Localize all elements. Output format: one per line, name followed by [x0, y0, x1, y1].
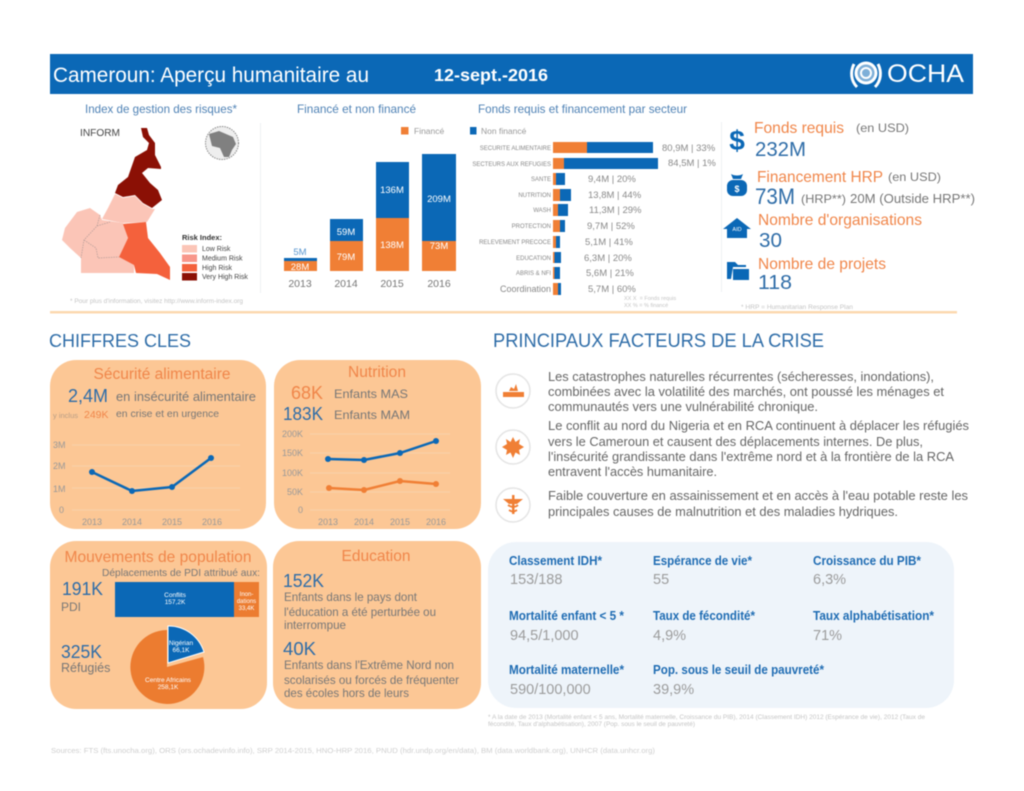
bar 2015: 136M	[380, 185, 404, 196]
key figure: 183K: Enfants MAM	[334, 408, 410, 422]
stat: financement HRP	[727, 169, 975, 209]
stat: fonds requis: Fonds requis	[754, 120, 844, 137]
panel: mouvements de population: Déplacements de PDI attribué aux:	[102, 567, 260, 579]
title: Cameroun: Aperçu humanitaire au	[53, 63, 369, 87]
line chart: food insecurity: 2M	[53, 461, 66, 471]
sector chart key	[624, 296, 676, 309]
panel: sécurité alimentaire	[50, 360, 266, 529]
line chart: malnutrition: 150K	[282, 448, 303, 458]
sector: réfugiés	[472, 158, 716, 169]
legend: unfunded: Non financé	[481, 126, 527, 136]
map legend: Medium Risk	[202, 256, 243, 262]
sector: sécurité alimentaire	[480, 142, 716, 154]
line chart: food insecurity: 2015	[162, 517, 182, 527]
key figure: 40K: scolarisés ou forcés de fréquenter	[284, 673, 459, 687]
map: high risk region	[119, 222, 170, 280]
indicators footnote: fécondité, Taux d'alphabétisation), 2007 (Pop. sous le seuil de pauvreté)	[488, 722, 695, 728]
sector: éducation: EDUCATION	[516, 256, 551, 262]
indicator: child mortality: 94,5/1,000	[510, 628, 579, 644]
sector: sécurité alimentaire: 80,9M | 33%	[662, 143, 716, 154]
line chart: food insecurity: 2016	[202, 517, 222, 527]
key figure: 249K: en crise et en urgence	[116, 408, 219, 420]
indicator: GDP growth: Croissance du PIB*	[813, 554, 921, 568]
pie: refugees by origin	[130, 626, 204, 704]
key figure: 152K: 152K	[283, 571, 324, 591]
year labels: 2016	[427, 278, 451, 290]
bar 2014	[330, 219, 363, 271]
stat: financement HRP: 73M	[755, 184, 795, 209]
panel: sécurité alimentaire: en insécurité alimentaire	[116, 390, 256, 404]
line chart: malnutrition: 2015	[390, 517, 410, 527]
line chart: food insecurity: 1M	[53, 484, 66, 494]
bar 2014: 79M	[337, 252, 355, 263]
key figure: 40K: 40K	[283, 639, 316, 659]
line chart: malnutrition: 0	[298, 505, 303, 515]
key figure: 249K	[53, 408, 219, 421]
year labels	[288, 278, 451, 290]
stat: financement HRP: (en USD)	[888, 170, 941, 184]
map: very high risk regions	[115, 128, 162, 208]
indicator: GDP growth: 6,3%	[813, 572, 846, 588]
line chart: malnutrition: 2016	[426, 517, 446, 527]
sector: santé: SANTE	[531, 177, 551, 183]
line chart: malnutrition: 2014	[354, 517, 374, 527]
sources: Sources: FTS (fts.unocha.org), ORS (ors.ochadevinfo.info), SRP 2014-2015, HNO-HRP 2016, PNUD (hdr.undp.org/en/data), BM (data.worldbank.org), UNHCR (data.unhcr.org)	[51, 746, 656, 755]
indicator: maternal mortality: Mortalité maternelle*	[509, 663, 624, 677]
key figure: 40K: des écoles hors de leurs	[284, 686, 409, 700]
sector: santé	[531, 173, 636, 185]
icon: money bag	[727, 174, 747, 196]
stat: nombre de projets: Nombre de projets	[758, 256, 886, 273]
icon: aid house: AID	[732, 227, 742, 233]
indicator: fertility: 4,9%	[653, 628, 686, 644]
bar 2015	[376, 162, 409, 271]
indicators footnote	[488, 715, 926, 728]
stat: financement HRP: Financement HRP	[757, 169, 883, 186]
crisis factor: natural disasters: combinées avec la volatilité des marchés, ont poussé les ménages et	[548, 384, 944, 399]
bar: displacement causes: 157,2K	[165, 599, 186, 606]
sector: nutrition: 13,8M | 44%	[588, 190, 642, 201]
pie: refugees by origin: 258,1K	[158, 684, 179, 691]
sector chart key: XX % = % financé	[624, 303, 668, 309]
stat: financement HRP: (HRP**)	[801, 192, 846, 206]
OCHA logo text: OCHA	[887, 60, 964, 88]
line chart: malnutrition	[282, 429, 450, 527]
icon: money bag: $	[734, 184, 740, 194]
sector: éducation: 6,3M | 20%	[584, 253, 632, 264]
map: low risk regions	[62, 194, 155, 273]
icon: disaster	[496, 374, 530, 408]
stat: nombre de projets	[727, 256, 886, 294]
bar 2013	[284, 247, 317, 273]
line chart: food insecurity: 3M	[53, 440, 66, 450]
stat: nombre d'organisations	[723, 212, 922, 252]
sector chart key: XX X = Fonds requis	[624, 296, 676, 302]
stat: fonds requis: (en USD)	[856, 121, 909, 135]
line chart: food insecurity: 2014	[122, 517, 142, 527]
bar 2016: 73M	[430, 241, 448, 252]
icon: caduceus	[496, 488, 530, 522]
bar: displacement causes: Conflits	[164, 592, 187, 599]
crisis factor: conflict	[496, 418, 969, 479]
icon: aid house	[723, 218, 751, 238]
heading: funding by sector: Fonds requis et financement par secteur	[478, 102, 687, 116]
sector: abris et NFI: ABRIS & NFI	[516, 271, 551, 277]
crisis factor: sanitation: Faible couverture en assainissement et en accès à l'eau potable reste les	[548, 488, 968, 503]
key figure: 68K: 68K	[291, 383, 323, 403]
sector: coordination: 5,7M | 60%	[588, 284, 636, 295]
date: 12-sept.-2016	[434, 65, 548, 85]
sector: relèvement précoce	[479, 236, 633, 248]
crisis factor: sanitation	[496, 488, 968, 522]
icon: UN emblem	[852, 63, 880, 87]
bar 2015: 138M	[380, 240, 404, 251]
panel: country indicators	[488, 542, 954, 708]
line chart: food insecurity	[53, 440, 240, 527]
line chart: malnutrition: 100K	[282, 468, 303, 478]
map legend: Low Risk	[202, 246, 231, 253]
bar 2014: 59M	[337, 227, 355, 238]
indicator: GDP growth	[813, 554, 921, 588]
key figure: PDI	[61, 579, 103, 614]
panel: nutrition	[274, 360, 481, 529]
year labels: 2015	[380, 278, 404, 290]
indicator: fertility	[653, 609, 755, 644]
map: Cameroon risk index	[62, 126, 248, 305]
crisis factor: natural disasters	[496, 369, 944, 414]
bar 2016	[422, 154, 456, 271]
crisis factor: conflict: vers le Cameroun et causent des déplacements internes. De plus,	[548, 434, 923, 449]
key figure: 249K: y inclus	[53, 411, 78, 420]
map legend: Risk Index:	[182, 233, 222, 242]
indicator: child mortality: Mortalité enfant < 5 *	[509, 609, 624, 623]
indicator: life expectancy	[653, 554, 752, 588]
HRP footnote: * HRP = Humanitarian Response Plan	[741, 305, 853, 311]
sector: coordination: Coordination	[500, 284, 551, 294]
sector: réfugiés: 84,5M | 1%	[668, 158, 716, 169]
map footnote: * Pour plus d'information, visitez http://www.inform-index.org	[70, 299, 243, 305]
bar: displacement causes: 33,4K	[239, 606, 254, 612]
indicator: poverty: Pop. sous le seuil de pauvreté*	[653, 663, 824, 677]
heading: principaux facteurs: PRINCIPAUX FACTEURS DE LA CRISE	[493, 330, 824, 352]
indicator: literacy: 71%	[813, 628, 842, 644]
map legend: High Risk	[202, 265, 232, 272]
stat: nombre de projets: 118	[758, 272, 792, 294]
sector: WASH: 11,3M | 29%	[589, 205, 642, 216]
indicator: life expectancy: 55	[653, 572, 669, 588]
sector: abris et NFI	[516, 267, 634, 279]
indicator: literacy	[813, 609, 934, 644]
key figure: 183K	[283, 404, 410, 424]
line chart: food insecurity: 2013	[82, 517, 102, 527]
indicator: literacy: Taux alphabétisation*	[813, 609, 934, 623]
stat: fonds requis	[729, 120, 909, 161]
crisis factor: conflict: entravent l'accès humanitaire.	[548, 464, 717, 479]
crisis factor: sanitation: principales causes de malnutrition et des maladies hydriques.	[548, 504, 898, 519]
line chart: food insecurity: 0	[59, 505, 64, 515]
key figure: 152K: l'éducation a été perturbée ou	[284, 605, 436, 619]
key figure: 249K: 249K	[84, 409, 109, 421]
stat: nombre d'organisations: Nombre d'organisations	[758, 212, 922, 229]
header banner	[50, 54, 973, 94]
key figure: 152K	[283, 571, 436, 632]
INFORM logo: INFORM	[80, 128, 120, 139]
panel: mouvements de population: Mouvements de population	[64, 549, 252, 566]
legend: funded: Financé	[414, 126, 445, 136]
pie: refugees by origin: Centre Africains	[145, 677, 192, 684]
key figure: réfugiés: Réfugiés	[61, 661, 110, 675]
sector: protection: 9,7M | 52%	[587, 221, 635, 232]
heading: risk index: Index de gestion des risques*	[85, 102, 237, 116]
indicator: maternal mortality	[509, 663, 624, 698]
indicator: fertility: Taux de fécondité*	[653, 609, 755, 623]
sector: relèvement précoce: RELEVEMENT PRECOCE	[479, 240, 551, 246]
bar: displacement causes	[115, 582, 259, 617]
crisis factor: natural disasters: communautés vers une vulnérabilité chronique.	[548, 399, 818, 414]
line chart: malnutrition: 200K	[282, 429, 303, 439]
indicator: maternal mortality: 590/100,000	[510, 682, 591, 698]
key figure: 152K: Enfants dans le pays dont	[284, 590, 418, 604]
sector: relèvement précoce: 5,1M | 41%	[585, 237, 633, 248]
sector: éducation	[516, 252, 632, 264]
sector: santé: 9,4M | 20%	[588, 174, 636, 185]
bar 2016: 209M	[427, 194, 451, 205]
key figure: réfugiés	[61, 642, 110, 675]
crisis factor: natural disasters: Les catastrophes naturelles récurrentes (sécheresses, inondations),	[548, 369, 934, 384]
sector: nutrition	[518, 189, 642, 201]
indicator: IDH: Classement IDH*	[509, 554, 602, 568]
panel: éducation: Education	[342, 548, 410, 565]
indicator: life expectancy: Espérance de vie*	[653, 554, 752, 568]
icon: explosion	[496, 430, 530, 464]
bar 2013: 5M	[293, 247, 307, 258]
pie: refugees by origin: 66,1K	[172, 647, 190, 654]
indicators footnote: * A la date de 2013 (Mortalité enfant < 5 ans, Mortalité maternelle, Croissance du PIB), 2014 (Classement IDH) 2012 (Espérance de vie), 2012 (Taux de	[488, 715, 926, 721]
heading: chiffres clés: CHIFFRES CLES	[49, 330, 191, 351]
chart: funding by sector	[472, 142, 716, 309]
stat: financement HRP: 20M (Outside HRP**)	[850, 191, 975, 206]
panel: sécurité alimentaire: Sécurité alimentaire	[94, 366, 230, 383]
icon: dollar: $	[729, 125, 745, 156]
stat: nombre d'organisations: 30	[759, 230, 782, 252]
sector: protection	[512, 220, 635, 232]
key figure: 2,4M: 2,4M	[68, 386, 108, 406]
key figure: 40K: Enfants dans l'Extrême Nord non	[284, 658, 454, 672]
indicator: poverty: 39,9%	[653, 682, 694, 698]
stat: fonds requis: 232M	[755, 139, 806, 161]
year labels: 2014	[334, 278, 358, 290]
panel: mouvements de population	[50, 541, 267, 709]
key figure: 68K: Enfants MAS	[334, 387, 408, 401]
sector: abris et NFI: 5,6M | 21%	[586, 268, 634, 279]
legend: funded	[401, 126, 445, 136]
sector: coordination	[500, 283, 636, 295]
sector: sécurité alimentaire: SECURITE ALIMENTAIRE	[480, 146, 551, 152]
map legend	[182, 233, 248, 281]
sector: WASH: WASH	[533, 208, 551, 214]
heading: funded and unfunded: Financé et non financé	[297, 102, 416, 116]
sector: WASH	[533, 204, 642, 216]
pie: refugees by origin: Nigérian	[169, 640, 193, 647]
icon: globe locator	[206, 126, 238, 160]
indicator: IDH	[509, 554, 602, 588]
year labels: 2013	[288, 278, 312, 290]
key figure: 68K	[291, 383, 408, 403]
sector: réfugiés: SECTEURS AUX REFUGIES	[472, 162, 551, 168]
line chart: malnutrition: 50K	[287, 487, 303, 497]
panel: éducation	[273, 541, 481, 709]
crisis factor: conflict: Le conflit au nord du Nigeria et en RCA continuent à déplacer les réfugiés	[548, 418, 969, 433]
crisis factor: conflict: l'insécurité grandissante dans l'extrême nord et à la frontière de la RCA	[548, 449, 954, 464]
indicator: poverty	[653, 663, 824, 698]
key figure: 183K: 183K	[283, 404, 323, 424]
key figure: 152K: interrompue	[284, 618, 346, 632]
panel: nutrition: Nutrition	[348, 364, 406, 381]
icon: folder	[727, 262, 749, 280]
indicator: child mortality	[509, 609, 624, 644]
key figure: PDI: PDI	[61, 600, 81, 614]
indicator: IDH: 153/188	[510, 572, 562, 588]
bar: displacement causes: Inon-	[240, 592, 253, 598]
key figure: réfugiés: 325K	[61, 642, 102, 662]
sector: protection: PROTECTION	[512, 224, 551, 230]
line chart: malnutrition: 2013	[318, 517, 338, 527]
map legend: Very High Risk	[202, 274, 248, 281]
sector: nutrition: NUTRITION	[518, 193, 551, 199]
bar 2013: 28M	[291, 262, 309, 273]
chart: funded vs unfunded by year	[284, 126, 527, 290]
key figure: PDI: 191K	[62, 579, 103, 599]
bar: displacement causes: dations	[237, 599, 256, 605]
key figure: 40K	[283, 639, 459, 700]
